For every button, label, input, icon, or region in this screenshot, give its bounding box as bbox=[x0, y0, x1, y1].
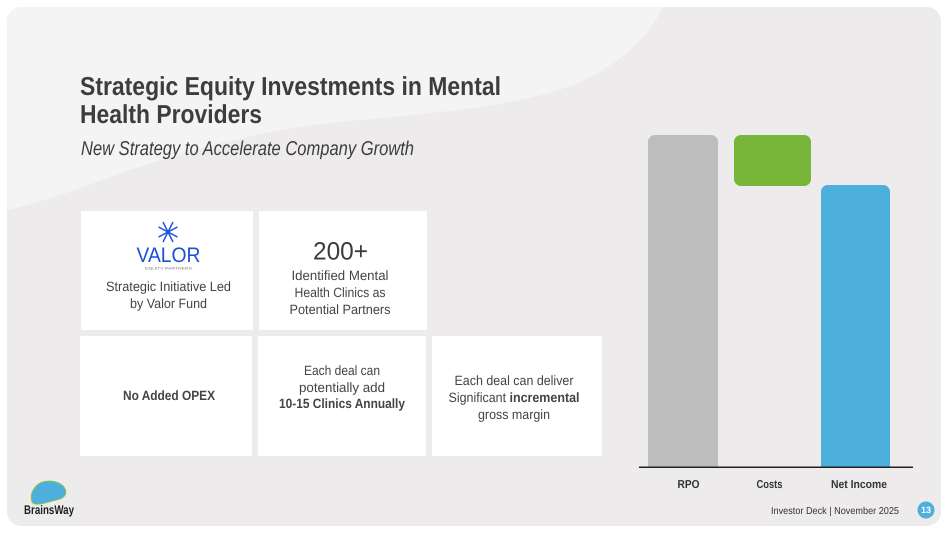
Valor logo tagline: EQUITY PARTNERS bbox=[145, 266, 193, 270]
card text: Strategic Initiative Led bbox=[106, 279, 231, 294]
waterfall chart bbox=[639, 135, 913, 491]
axis labels: Costs bbox=[756, 479, 782, 491]
bar: RPO bbox=[648, 135, 718, 467]
card: clinics per deal bbox=[258, 336, 426, 456]
card text bbox=[448, 373, 580, 422]
big number: 200+ bbox=[313, 238, 368, 266]
axis labels: Net Income bbox=[831, 479, 887, 491]
axis line bbox=[639, 466, 913, 468]
icon: Valor asterisk bbox=[158, 222, 178, 242]
card text: No Added OPEX bbox=[123, 388, 215, 403]
card text: Significant incremental bbox=[448, 390, 580, 405]
card text: by Valor Fund bbox=[130, 296, 207, 311]
logo: BrainsWay bbox=[24, 481, 74, 517]
Valor logo wordmark: VALOR bbox=[136, 244, 200, 267]
title: Health Providers bbox=[80, 99, 262, 129]
footer text: Investor Deck | November 2025 bbox=[771, 506, 899, 517]
card text: Identified Mental bbox=[292, 268, 388, 283]
card text bbox=[290, 268, 391, 317]
bar: Net Income bbox=[821, 185, 890, 467]
card: incremental margin bbox=[432, 336, 602, 456]
subtitle: New Strategy to Accelerate Company Growth bbox=[81, 138, 414, 160]
card text bbox=[279, 363, 405, 411]
title: Strategic Equity Investments in Mental bbox=[80, 71, 501, 101]
bar: Costs bbox=[734, 135, 811, 186]
icon: brain bbox=[31, 481, 66, 504]
page number badge bbox=[918, 502, 934, 518]
card text: gross margin bbox=[478, 407, 550, 422]
card: no added OPEX bbox=[80, 336, 252, 456]
card text: Potential Partners bbox=[290, 302, 391, 317]
card text: Each deal can deliver bbox=[454, 373, 574, 388]
card text: Health Clinics as bbox=[294, 285, 386, 300]
card text: 10-15 Clinics Annually bbox=[279, 396, 405, 411]
card: 200+ clinics bbox=[259, 211, 427, 330]
axis labels bbox=[678, 479, 887, 491]
card text bbox=[106, 279, 231, 311]
title bbox=[80, 71, 501, 129]
card: Valor bbox=[81, 211, 253, 330]
card text: potentially add bbox=[299, 380, 385, 395]
card text: Each deal can bbox=[304, 363, 380, 378]
wordmark: BrainsWay bbox=[24, 503, 74, 517]
axis labels: RPO bbox=[678, 479, 700, 491]
page number badge: 13 bbox=[921, 505, 931, 515]
